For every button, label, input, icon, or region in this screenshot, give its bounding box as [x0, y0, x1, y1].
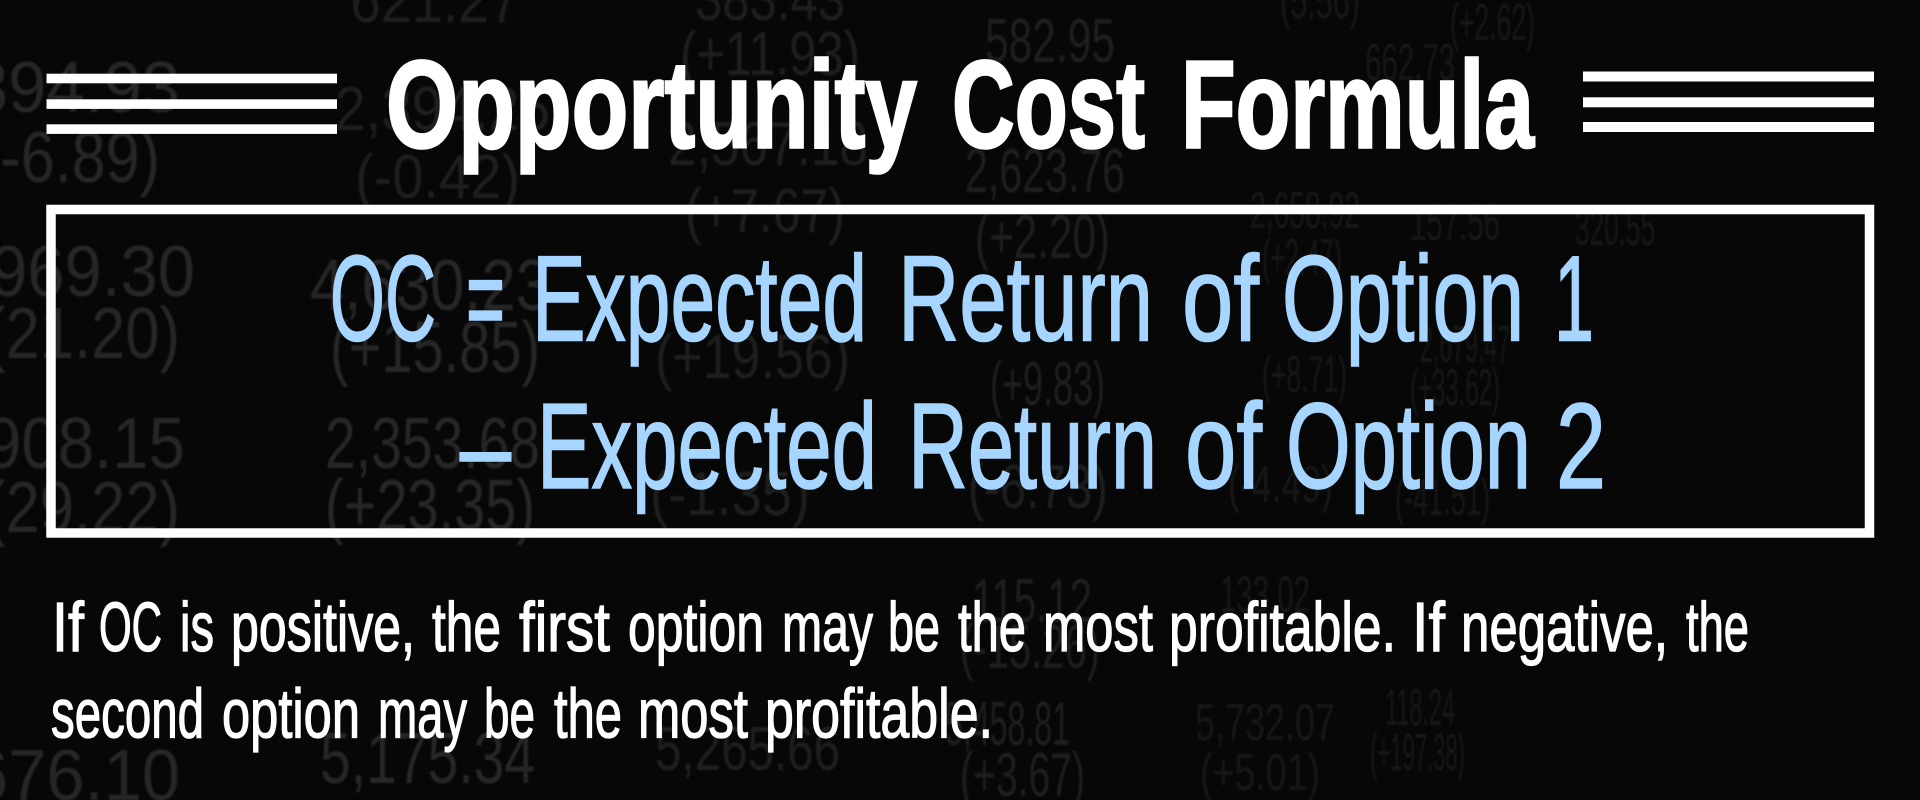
formula line 1: of — [1182, 230, 1260, 366]
formula line 1: Option — [1282, 230, 1524, 366]
explanation text: most — [638, 674, 748, 752]
background: dark stock ticker numbers: 118.24 — [1385, 679, 1455, 737]
decorative bars: left — [46, 74, 337, 134]
formula line 1: Expected — [532, 230, 867, 366]
explanation text: the — [432, 588, 501, 666]
explanation text: negative, — [1461, 588, 1668, 666]
decorative bars: right — [1583, 72, 1874, 132]
background: dark stock ticker numbers: 662.73 — [1365, 34, 1455, 92]
background: dark stock ticker numbers: 320.55 — [1575, 199, 1655, 257]
background: dark stock ticker numbers: (+2.47) — [1262, 229, 1342, 287]
formula line 1: = — [466, 230, 505, 366]
background: dark stock ticker numbers: (+2.20) — [975, 203, 1110, 272]
explanation text: first — [519, 588, 610, 666]
background: dark stock ticker numbers: 4,630.23 — [310, 246, 550, 326]
background: dark stock ticker numbers: (+19.56) — [655, 323, 850, 392]
explanation text: be — [484, 674, 535, 752]
background: dark stock ticker numbers: (-6.73) — [968, 453, 1108, 522]
explanation text: the — [554, 674, 622, 752]
formula line 2: Return — [908, 378, 1157, 514]
background: dark stock ticker numbers: 5,265.66 — [655, 715, 840, 784]
background: dark stock ticker numbers: (-41.51) — [1395, 469, 1490, 527]
explanation text: the — [958, 588, 1026, 666]
explanation text: option — [628, 588, 764, 666]
background: dark stock ticker numbers: 133.02 — [1220, 566, 1310, 624]
background: dark stock ticker numbers: (+15.85) — [330, 308, 540, 388]
explanation text: may — [782, 588, 873, 666]
formula line 1 — [330, 230, 1594, 366]
formula line 2: of — [1185, 378, 1263, 514]
explanation text: the — [1686, 588, 1749, 666]
explanation text: OC — [99, 588, 162, 666]
background: dark stock ticker numbers: (+11.93) — [680, 20, 860, 89]
explanation text: be — [888, 588, 940, 666]
formula line 1: Return — [898, 230, 1153, 366]
background: dark stock ticker numbers: 2,658.92 — [1250, 182, 1360, 240]
formula line 1: 1 — [1554, 230, 1594, 366]
background: dark stock ticker numbers: (+7.67) — [685, 177, 845, 246]
explanation text — [51, 588, 1749, 752]
title: Cost — [952, 36, 1145, 174]
background: dark stock ticker numbers: (-1.35) — [650, 460, 810, 529]
panel: formula box — [51, 210, 1870, 533]
background: dark stock ticker numbers: 2,353.68 — [325, 404, 540, 484]
explanation text: is — [180, 588, 214, 666]
background: dark stock ticker numbers: 157.56 — [1410, 194, 1500, 252]
background: dark stock ticker numbers: (+197.38) — [1370, 724, 1465, 782]
background: dark stock ticker numbers: (-4.49) — [1228, 456, 1333, 514]
background: dark stock ticker numbers: (+33.62) — [1410, 359, 1500, 417]
formula line 2: Option — [1286, 378, 1531, 514]
formula line 2: – — [460, 378, 511, 514]
background: dark stock ticker numbers: 2,567.18 — [668, 110, 868, 179]
formula line 2: Expected — [537, 378, 877, 514]
title: Formula — [1181, 36, 1535, 174]
explanation text: profitable. — [765, 674, 993, 752]
background: dark stock ticker numbers: 2,679.47 — [1420, 316, 1510, 374]
explanation text: If — [1412, 588, 1445, 666]
explanation text: second — [51, 674, 204, 752]
background: dark stock ticker numbers: 5,175.34 — [320, 719, 535, 799]
formula text — [330, 230, 1606, 514]
formula line 2 — [460, 378, 1606, 514]
background: dark stock ticker numbers: (-15.26) — [960, 613, 1100, 682]
background: dark stock ticker numbers: (+23.35) — [325, 466, 535, 546]
explanation text: most — [1043, 588, 1153, 666]
formula line 2: 2 — [1556, 378, 1606, 514]
explanation text: positive, — [231, 588, 415, 666]
title: Opportunity — [386, 36, 917, 174]
title — [386, 36, 1535, 174]
background: dark stock ticker numbers: (+8.71) — [1262, 346, 1347, 404]
background: dark stock ticker numbers: 2,623.76 — [965, 137, 1125, 206]
background: dark stock ticker numbers: 5,458.81 — [945, 690, 1070, 759]
background: dark stock ticker numbers: (+9.83) — [990, 350, 1105, 419]
explanation text: may — [378, 674, 467, 752]
background: dark stock ticker numbers: 5,732.07 — [1195, 694, 1335, 752]
explanation text: profitable. — [1169, 588, 1396, 666]
background: dark stock ticker numbers: 582.95 — [985, 7, 1115, 76]
formula line 1: OC — [330, 230, 436, 366]
explanation text: option — [222, 674, 360, 752]
background: dark stock ticker numbers: 115.12 — [972, 567, 1092, 636]
explanation text: If — [52, 588, 84, 666]
background: dark stock ticker numbers: 2,394.25 — [335, 75, 550, 144]
background: dark stock ticker numbers: (-0.42) — [355, 143, 520, 212]
